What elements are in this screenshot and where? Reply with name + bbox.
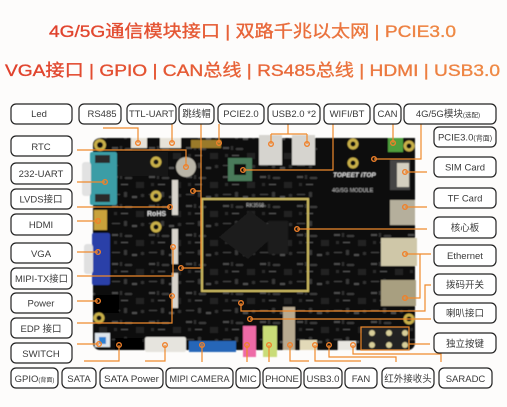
label: TF Card: TF Card [448,194,482,204]
label: 独立按键 [434,333,496,353]
label: SARADC: SARADC [446,374,485,385]
label: RTC [11,136,72,156]
label: HDMI [11,214,72,235]
label: USB2.0 *2 [268,104,320,124]
232 connector [90,152,117,205]
USB 2.0 ports [259,135,282,165]
development board [82,135,417,357]
label: EDP 接口: EDP 接口 [20,323,62,335]
label: USB2.0 *2: USB2.0 *2 [272,109,316,120]
label: Led [11,104,72,124]
label: HDMI: HDMI [29,220,53,231]
label: Power: Power [28,298,54,310]
label: USB3.0: USB3.0 [306,374,340,385]
label: 核心板 [434,217,496,238]
bottom labels [11,368,492,388]
TTL pin headers [131,138,147,148]
label: 拨码开关: 拨码开关 [446,279,484,291]
label: 4G/5G模块: 4G/5G模块(选配) [416,108,480,120]
label: MIPI-TX接口 [11,268,72,289]
label: Ethernet [434,245,496,266]
connection dots [96,141,407,347]
USB3.0 header [300,340,317,350]
HDMI connector [94,210,107,230]
label: 红外接收头 [382,368,434,388]
FAN header [338,341,356,350]
label: PHONE [263,368,301,388]
label: FAN [345,368,377,388]
MIPI camera connector [189,341,236,352]
label: VGA: VGA [31,249,52,260]
label: 232-UART: 232-UART [19,169,64,180]
label: SIM Card: SIM Card [445,162,485,174]
development board: 4G/5G MODULE [332,188,374,194]
label: SATA [62,368,96,388]
label: LVDS接口 [11,189,72,209]
left labels [11,136,72,363]
label: 4G/5G模块 [404,104,496,124]
pcb [93,138,415,350]
label: RTC: RTC [31,142,51,153]
SoC chip [219,211,278,259]
tactile buttons [362,327,409,350]
title line 1: 4G/5G通信模块接口 | 双路千兆以太网 | PCIE3.0 [49,22,456,41]
switch [95,333,110,347]
label: MIC [236,368,260,388]
label: SIM Card [434,157,496,177]
label: Led: Led [31,109,47,120]
LVDS FPC connectors [172,180,178,215]
label: Power [11,293,72,313]
mounting holes [96,140,104,150]
label: SWITCH: SWITCH [22,349,60,360]
TF slot [390,200,415,225]
label: PCIE2.0 [218,104,264,124]
RoHS mark: RoHS [147,211,166,218]
SATA power connector [145,337,186,352]
label: WIFI/BT [324,104,370,124]
label: 喇叭接口: 喇叭接口 [446,308,484,320]
MIC jack [243,326,256,357]
label: SATA Power [100,368,163,388]
label: 跳线帽: 跳线帽 [182,108,211,120]
USB3.0 vertical [283,307,295,350]
power jack [93,295,119,313]
label: MIPI-TX接口: MIPI-TX接口 [15,273,68,285]
label: USB3.0 [304,368,342,388]
Ethernet ports [381,238,417,266]
label: LVDS接口: LVDS接口 [19,194,63,206]
label: SATA Power: SATA Power [104,374,159,385]
right labels [434,127,496,353]
label: 232-UART [11,163,72,184]
label: MIPI CAMERA: MIPI CAMERA [170,374,230,385]
PHONE jack [263,326,277,357]
label: PCIE3.0: PCIE3.0(背面) [438,132,492,144]
4G/5G module area [317,138,415,228]
label: TTL-UART [127,104,176,124]
RTC battery [176,157,196,177]
label: 核心板: 核心板 [451,222,480,234]
development board: RK3568 [246,203,264,209]
label: PCIE3.0 [434,127,496,147]
label: EDP 接口 [11,318,72,338]
label: MIC: MIC [239,374,257,385]
WIFI module [228,158,252,181]
label: SATA: SATA [67,374,91,385]
title line 2: VGA接口 | GPIO | CAN总线 | RS485总线 | HDMI | USB3.0 [5,61,500,80]
SATA connector [115,338,143,350]
label: TF Card [434,188,496,208]
label: 红外接收头: 红外接收头 [384,373,432,385]
label: 跳线帽 [179,104,214,124]
label: FAN: FAN [352,374,370,385]
label: VGA [11,243,72,263]
SIM slot [390,160,410,190]
label: PHONE: PHONE [265,374,299,385]
label: 拨码开关 [434,274,496,295]
label: PCIE2.0: PCIE2.0 [223,109,259,120]
label: TTL-UART: TTL-UART [129,109,174,120]
label: GPIO [11,368,58,388]
label: RS485: RS485 [87,109,117,120]
top labels [11,104,496,124]
core board [202,199,308,291]
VGA connector [92,233,110,285]
label: Ethernet: Ethernet [447,251,483,262]
label: SWITCH [11,343,72,363]
label: WIFI/BT: WIFI/BT [330,109,365,120]
label: MIPI CAMERA [166,368,233,388]
label: 喇叭接口 [434,303,496,323]
label: SARADC [439,368,492,388]
CAN terminal [388,138,403,152]
leader lines [77,124,441,362]
label: CAN [374,104,401,124]
upper left clean area [118,152,168,176]
label: RS485 [79,104,121,124]
label: 独立按键: 独立按键 [446,338,484,350]
label: GPIO: GPIO(背面) [15,374,54,385]
label: CAN: CAN [377,109,398,120]
development board: TOPEET iTOP [333,172,376,179]
